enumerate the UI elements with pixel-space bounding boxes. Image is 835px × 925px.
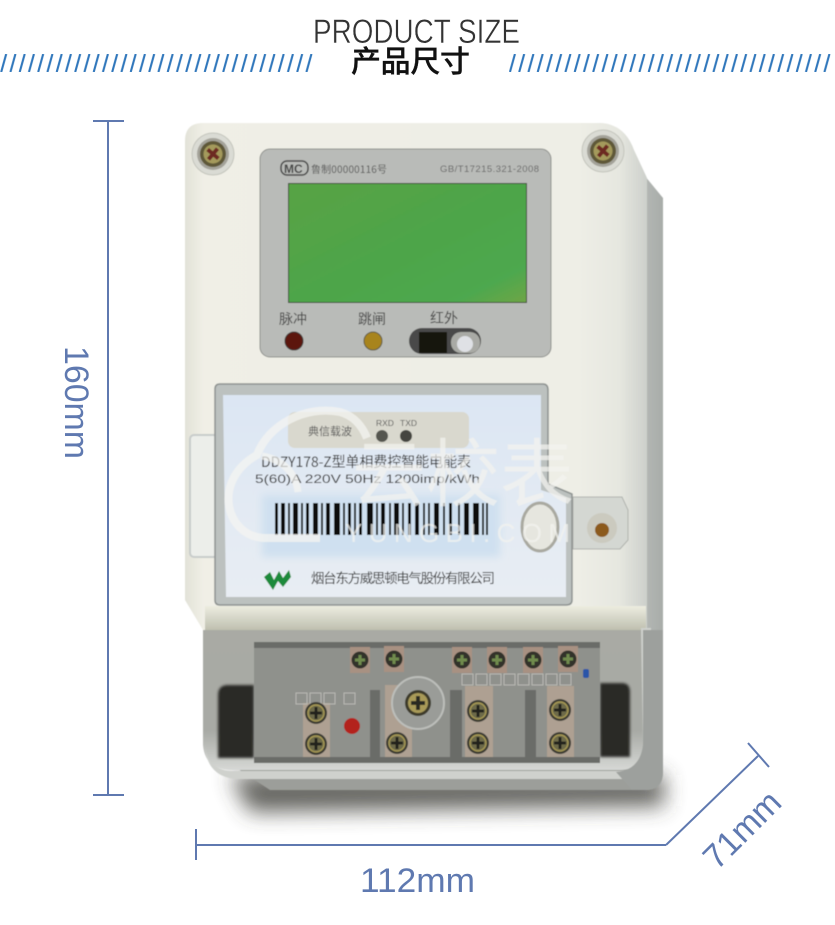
label: 160mm: 160mm: [57, 346, 95, 459]
RXD lamp: [376, 430, 388, 442]
hinge: [190, 435, 218, 557]
LCD screen: [288, 184, 526, 302]
LED: yellow: [364, 332, 382, 350]
watermark url: YUNGBI.COM: [345, 518, 570, 548]
display panel: [260, 149, 551, 357]
screw: top right: [582, 130, 624, 172]
label: 112mm: 112mm: [360, 862, 475, 900]
infrared port: [409, 328, 481, 354]
decorative stripes: right: [509, 54, 831, 72]
licence number: 鲁制00000116号: [311, 161, 387, 176]
cover highlight: [205, 628, 651, 779]
nameplate: [215, 384, 572, 605]
meter front body: [185, 123, 647, 630]
terminal cavity: right: [600, 683, 630, 757]
company name: 烟台东方威思顿电气股份有限公司: [311, 567, 495, 587]
terminal cavity: left: [218, 685, 254, 758]
dimension: height: [93, 121, 124, 795]
oval button: [522, 503, 558, 551]
blue indicator: [583, 669, 589, 678]
ratings: 5(60)A 220V 50Hz 1200imp/kWh: [255, 472, 480, 486]
barcode background: [262, 495, 500, 557]
lower right corner: [616, 630, 663, 790]
MC mark: [281, 161, 308, 176]
terminal plates: [303, 685, 574, 757]
top terminal screws: [350, 646, 578, 673]
meter side panel: [600, 170, 663, 790]
dimension: width and depth: [196, 743, 769, 860]
title: PRODUCT SIZE: PRODUCT SIZE: [313, 13, 520, 51]
label: pulse: 脉冲: [279, 309, 307, 329]
logo: [264, 570, 291, 590]
decorative stripes: left: [0, 54, 314, 72]
title: Chinese heading: 产品尺寸: [351, 37, 470, 81]
lower terminal screws: [305, 699, 571, 755]
TXD label: TXD: [400, 418, 417, 428]
watermark: [228, 411, 574, 548]
meter shadow: [230, 775, 664, 812]
TXD lamp: [400, 430, 412, 442]
centre sealing screw: [392, 677, 444, 729]
watermark cloud: [228, 411, 367, 538]
label: 71mm: 71mm: [696, 783, 789, 877]
label: infrared: 红外: [430, 308, 458, 328]
comm window: [288, 412, 469, 448]
body lower ledge: [205, 606, 646, 631]
watermark inner arc: [262, 456, 298, 492]
LED: red: [285, 332, 303, 350]
RXD label: RXD: [376, 418, 394, 428]
model name: DDZY178-Z型单相费控智能电能表: [261, 451, 471, 472]
carrier label: 典信载波: [308, 423, 352, 439]
watermark name: 云校表: [352, 415, 574, 522]
terminal cover: [203, 628, 651, 779]
label: trip: 跳闸: [358, 309, 386, 329]
barcode: [275, 503, 488, 535]
red indicator: [344, 718, 360, 734]
meter photo: [185, 123, 663, 790]
standard number: GB/T17215.321-2008: [440, 164, 539, 175]
terminal block: [254, 642, 600, 763]
MC mark: MC: [284, 162, 303, 176]
meter bottom band: [232, 765, 650, 790]
seal tab: [573, 497, 628, 549]
block shading: [254, 642, 600, 763]
screw: top left: [192, 133, 234, 175]
number strip: [296, 674, 571, 704]
